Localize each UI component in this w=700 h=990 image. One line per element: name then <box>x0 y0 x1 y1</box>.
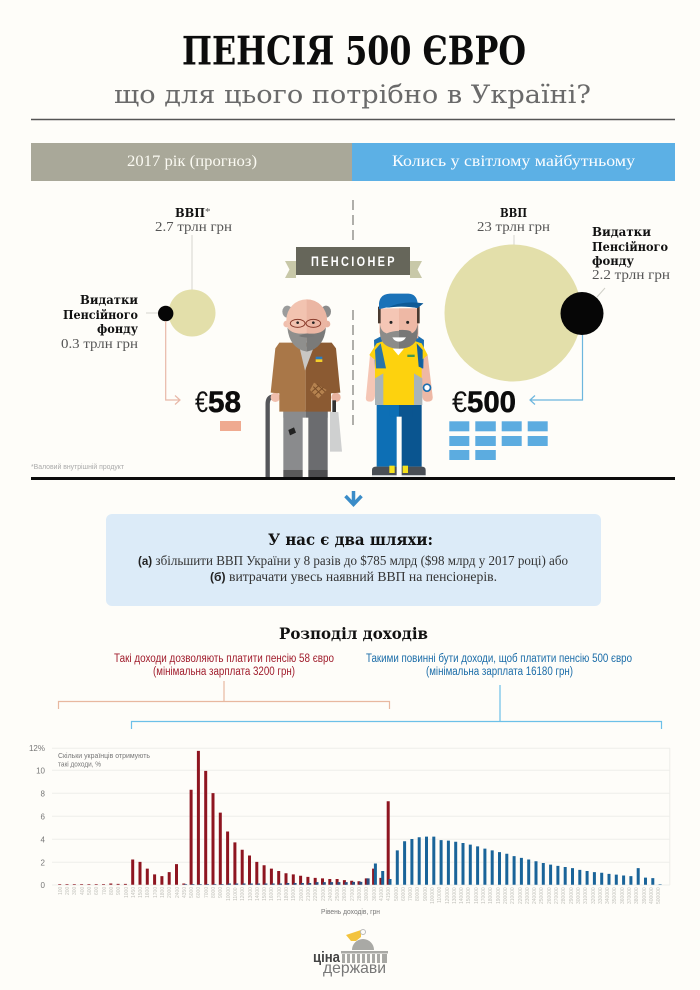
x axis labels: 1600 <box>145 887 151 898</box>
x axis labels: 600 <box>94 887 100 895</box>
x axis labels: 500 <box>87 887 93 895</box>
label: pension fund future <box>592 225 671 283</box>
header band: 2017: 2017 рік (прогноз) <box>127 153 257 170</box>
label: GDP future: 23 трлн грн <box>477 220 551 235</box>
header band: future: Колись у світлому майбутньому <box>392 153 635 170</box>
value: 500 euro: 500 <box>467 386 516 419</box>
x axis labels: 90000 <box>423 887 429 901</box>
x axis labels <box>58 886 662 904</box>
heading: income distribution: Розподіл доходів <box>279 624 428 643</box>
subtitle: що для цього потрібно в Україні? <box>114 80 591 109</box>
x axis labels: 7000 <box>204 887 210 898</box>
x axis labels: 270000 <box>554 887 560 904</box>
icon: future pensioner <box>366 294 433 476</box>
panel: two ways: (а) збільшити ВВП України у 8 разів до $785 млрд ($98 млрд у 2017 році) або <box>138 553 568 568</box>
x axis labels: 380000 <box>634 887 640 904</box>
x axis labels: 280000 <box>561 887 567 904</box>
x axis labels: 5000 <box>189 887 195 898</box>
x axis labels: 1000 <box>124 887 130 898</box>
x axis labels: 120000 <box>445 887 451 904</box>
x axis labels: 180000 <box>488 887 494 904</box>
x axis labels: 22000 <box>313 887 319 901</box>
label: pension fund 2017 <box>61 293 139 352</box>
x axis labels: 80000 <box>415 887 421 901</box>
panel: two ways: (б) витрачати увесь наявний ВВП на пенсіонерів. <box>210 569 497 584</box>
x axis labels: 1500 <box>138 887 144 898</box>
footnote: *Валовий внутрішній продукт <box>31 462 125 471</box>
logo: price of state: держави <box>323 960 386 977</box>
x axis labels: 220000 <box>518 887 524 904</box>
x axis labels: 290000 <box>569 887 575 904</box>
x axis labels: 1700 <box>153 887 159 898</box>
label: GDP 2017: * <box>205 206 210 218</box>
x axis labels: 200000 <box>503 887 509 904</box>
x axis labels: 250000 <box>539 887 545 904</box>
arrow: pink to 58 <box>166 321 180 404</box>
x axis labels: 20000 <box>299 887 305 901</box>
x axis labels: 6000 <box>196 887 202 898</box>
bar chart: income distribution: 12% <box>29 744 45 753</box>
label: GDP future: ВВП <box>500 206 527 220</box>
caption: blue: Такими повинні бути доходи, щоб платити пенсію 500 євро <box>366 653 632 665</box>
panel: two ways: У нас є два шляхи: <box>268 530 433 549</box>
x axis labels: 300000 <box>576 887 582 904</box>
x axis labels: 24000 <box>328 887 334 901</box>
caption: red <box>114 653 334 678</box>
x axis labels: 18000 <box>284 887 290 901</box>
x axis labels: 400 <box>80 887 86 895</box>
label: pension fund 2017: Видатки <box>80 293 138 307</box>
caption: red: (мінімальна зарплата 3200 грн) <box>153 666 295 678</box>
x axis labels: 36000 <box>372 887 378 901</box>
x axis labels: 500000 <box>656 887 662 904</box>
bar chart: income distribution: Рівень доходів, грн <box>321 907 380 916</box>
title: ПЕНСІЯ 500 ЄВРО <box>182 28 526 74</box>
x axis labels: 26000 <box>342 887 348 901</box>
x axis labels: 320000 <box>591 887 597 904</box>
label: pension fund future: 2.2 трлн грн <box>592 268 671 283</box>
value: 58 euro: 58 <box>208 386 241 419</box>
panel: two ways <box>106 514 601 606</box>
label: pension fund 2017: Пенсійного <box>63 308 138 322</box>
x axis labels: 390000 <box>642 887 648 904</box>
bar chart: income distribution: Скільки українців отримують <box>58 751 150 760</box>
x axis labels: 8000 <box>211 887 217 898</box>
x axis labels: 19000 <box>291 887 297 901</box>
x axis labels: 16000 <box>269 887 275 901</box>
bar chart: income distribution <box>29 744 670 916</box>
x axis labels: 900 <box>116 887 122 895</box>
x axis labels: 700 <box>102 887 108 895</box>
x axis labels: 210000 <box>510 887 516 904</box>
x axis labels: 11000 <box>233 887 239 901</box>
ribbon: pensioner: ПЕНСІОНЕР <box>311 254 397 269</box>
x axis labels: 9000 <box>218 887 224 898</box>
x axis labels: 15000 <box>262 887 268 901</box>
bar chart: income distribution: 8 <box>41 790 46 798</box>
label: pension fund future: Пенсійного <box>592 240 668 254</box>
x axis labels: 230000 <box>525 887 531 904</box>
x axis labels: 70000 <box>408 887 414 901</box>
x axis labels: 330000 <box>598 887 604 904</box>
x axis labels: 2400 <box>175 887 181 898</box>
arrow: down <box>346 491 362 504</box>
bar chart: income distribution: 0 <box>41 881 46 890</box>
bar chart: income distribution: 10 <box>36 766 46 776</box>
x axis labels: 370000 <box>627 887 633 904</box>
x axis labels: 350000 <box>612 887 618 904</box>
x axis labels: 240000 <box>532 887 538 904</box>
bar chart: income distribution: 4 <box>41 836 46 844</box>
icon: old pensioner <box>268 299 342 477</box>
blue blocks <box>449 421 548 460</box>
header band: future <box>352 143 675 181</box>
label: GDP future <box>477 206 551 235</box>
x axis labels: 200 <box>65 887 71 895</box>
x axis labels: 4350 <box>182 887 188 898</box>
ribbon: pensioner <box>285 247 422 278</box>
x axis labels: 340000 <box>605 887 611 904</box>
x axis labels: 150000 <box>466 887 472 904</box>
value: 58 euro: € <box>195 386 208 419</box>
x axis labels: 1800 <box>160 887 166 898</box>
x axis labels: 300 <box>72 887 78 895</box>
x axis labels: 2000 <box>167 887 173 898</box>
label: GDP 2017 <box>155 206 233 235</box>
x axis labels: 190000 <box>496 887 502 904</box>
x axis labels: 50000 <box>394 887 400 901</box>
label: GDP 2017: 2.7 трлн грн <box>155 220 233 235</box>
caption: blue: (мінімальна зарплата 16180 грн) <box>426 666 573 678</box>
panel: 2017 circles <box>146 235 216 336</box>
ground line <box>31 477 675 480</box>
x axis labels: 100000 <box>430 887 436 904</box>
x axis labels: 13000 <box>248 887 254 901</box>
arrow: blue to 500 <box>530 335 582 404</box>
label: pension fund 2017: 0.3 трлн грн <box>61 337 139 352</box>
x axis labels: 60000 <box>401 887 407 901</box>
caption: red: Такі доходи дозволяють платити пенсію 58 євро <box>114 653 334 665</box>
x axis labels: 41500 <box>386 887 392 901</box>
x axis labels: 21000 <box>306 887 312 901</box>
x axis labels: 28000 <box>357 887 363 901</box>
x axis labels: 14000 <box>255 887 261 901</box>
label: pension fund 2017: фонду <box>97 322 138 336</box>
x axis labels: 100 <box>58 887 64 895</box>
x axis labels: 25000 <box>335 887 341 901</box>
x axis labels: 41000 <box>379 887 385 901</box>
bracket: red range <box>58 681 390 709</box>
x axis labels: 30000 <box>364 887 370 901</box>
x axis labels: 360000 <box>620 887 626 904</box>
x axis labels: 27000 <box>350 887 356 901</box>
bar chart: income distribution: 6 <box>41 812 46 822</box>
bracket: blue range <box>132 685 662 729</box>
pink block <box>220 421 241 431</box>
x axis labels: 140000 <box>459 887 465 904</box>
panel: future circles <box>444 235 605 382</box>
x axis labels: 310000 <box>583 887 589 904</box>
bar chart: income distribution: 2 <box>41 858 46 868</box>
x axis labels: 170000 <box>481 887 487 904</box>
series: blue small <box>184 878 370 885</box>
x axis labels: 23000 <box>321 887 327 901</box>
x axis labels: 110000 <box>437 887 443 903</box>
logo: price of state: ціна <box>313 949 341 966</box>
x axis labels: 17000 <box>277 887 283 901</box>
header band: 2017 <box>31 143 352 181</box>
x axis labels: 400000 <box>649 887 655 904</box>
label: pension fund future: фонду <box>592 254 634 268</box>
bar chart: income distribution: такі доходи, % <box>58 760 101 768</box>
label: pension fund future: Видатки <box>592 225 651 239</box>
caption: blue <box>366 653 632 678</box>
x axis labels: 130000 <box>452 887 458 904</box>
x axis labels: 800 <box>109 887 115 895</box>
x axis labels: 10000 <box>226 887 232 901</box>
logo: price of state <box>313 930 388 977</box>
x axis labels: 12000 <box>240 887 246 901</box>
x axis labels: 160000 <box>474 887 480 904</box>
x axis labels: 260000 <box>547 887 553 904</box>
series: blue <box>374 837 662 885</box>
label: GDP 2017: ВВП <box>175 206 205 220</box>
series: red <box>58 751 390 885</box>
value: 500 euro: € <box>452 386 467 419</box>
x axis labels: 1450 <box>131 887 137 898</box>
